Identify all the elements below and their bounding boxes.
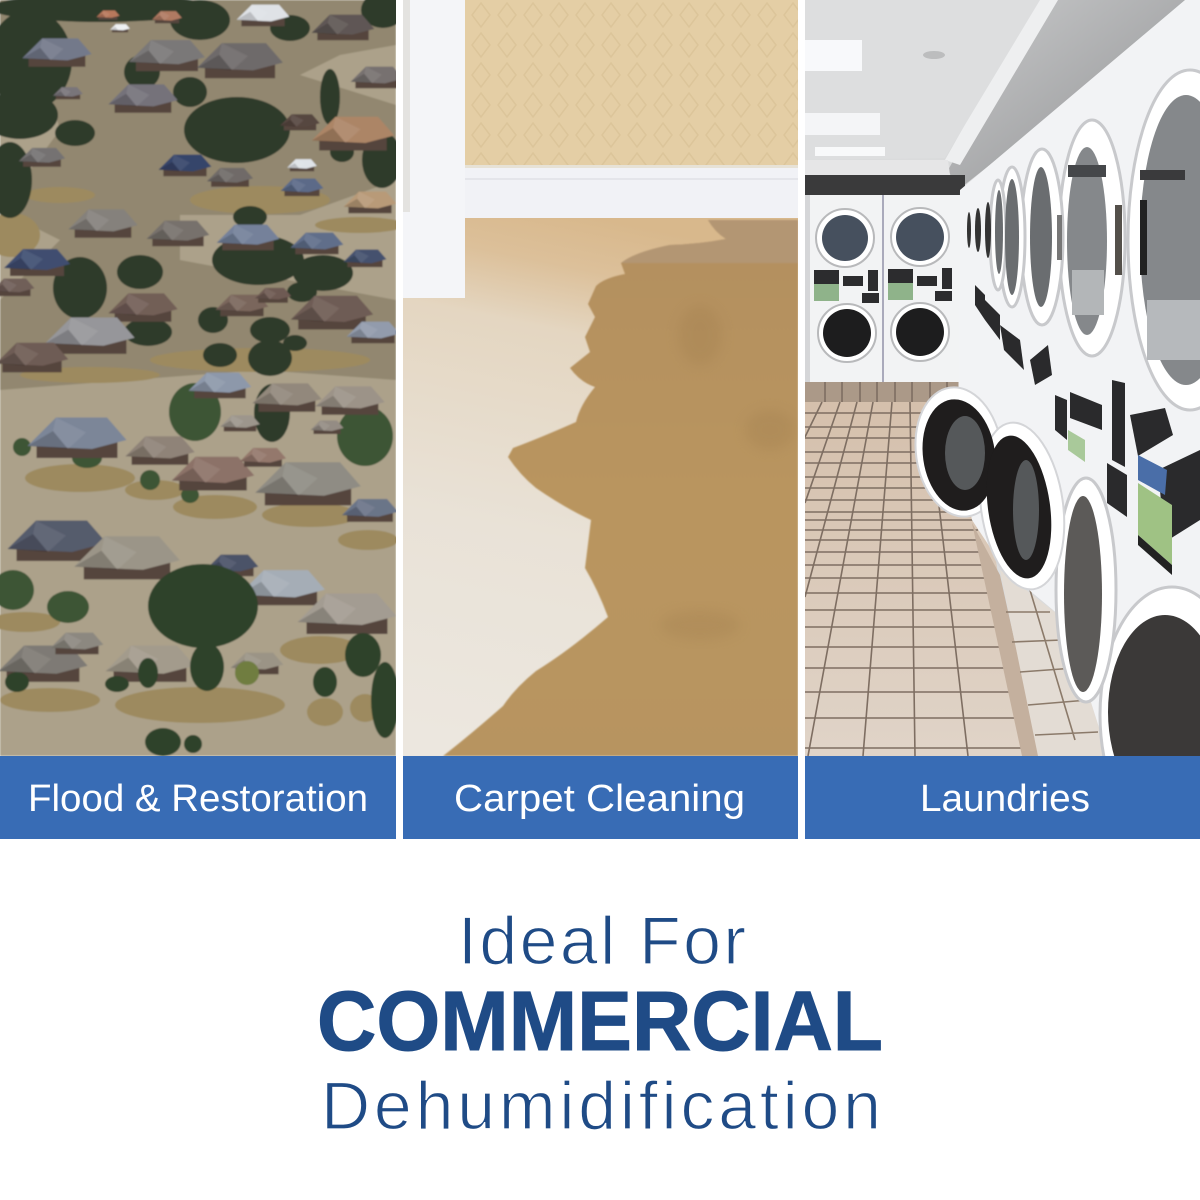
label bar: Laundries <box>805 756 1200 839</box>
label bar: Carpet Cleaning <box>403 756 798 839</box>
photo: flooded neighbourhood aerial view <box>0 0 405 756</box>
heading: Ideal For Commercial Dehumidification <box>317 903 883 1144</box>
panel: flood and restoration <box>0 0 405 839</box>
heading line: COMMERCIAL: COMMERCIAL <box>317 974 883 1068</box>
label bar: Flood & Restoration: Flood & Restoration <box>28 778 368 820</box>
photo: water-stained carpet by a wall <box>403 0 798 756</box>
label bar: Carpet Cleaning: Carpet Cleaning <box>454 778 745 820</box>
heading line: Ideal For: Ideal For <box>458 903 746 979</box>
label bar: Laundries: Laundries <box>920 778 1090 820</box>
panel: laundries <box>805 0 1200 843</box>
label bar: Flood & Restoration <box>0 756 396 839</box>
heading line: Dehumidification: Dehumidification <box>321 1068 881 1144</box>
panel: carpet cleaning <box>403 0 798 839</box>
photo: laundromat with rows of white machines <box>805 0 1200 756</box>
